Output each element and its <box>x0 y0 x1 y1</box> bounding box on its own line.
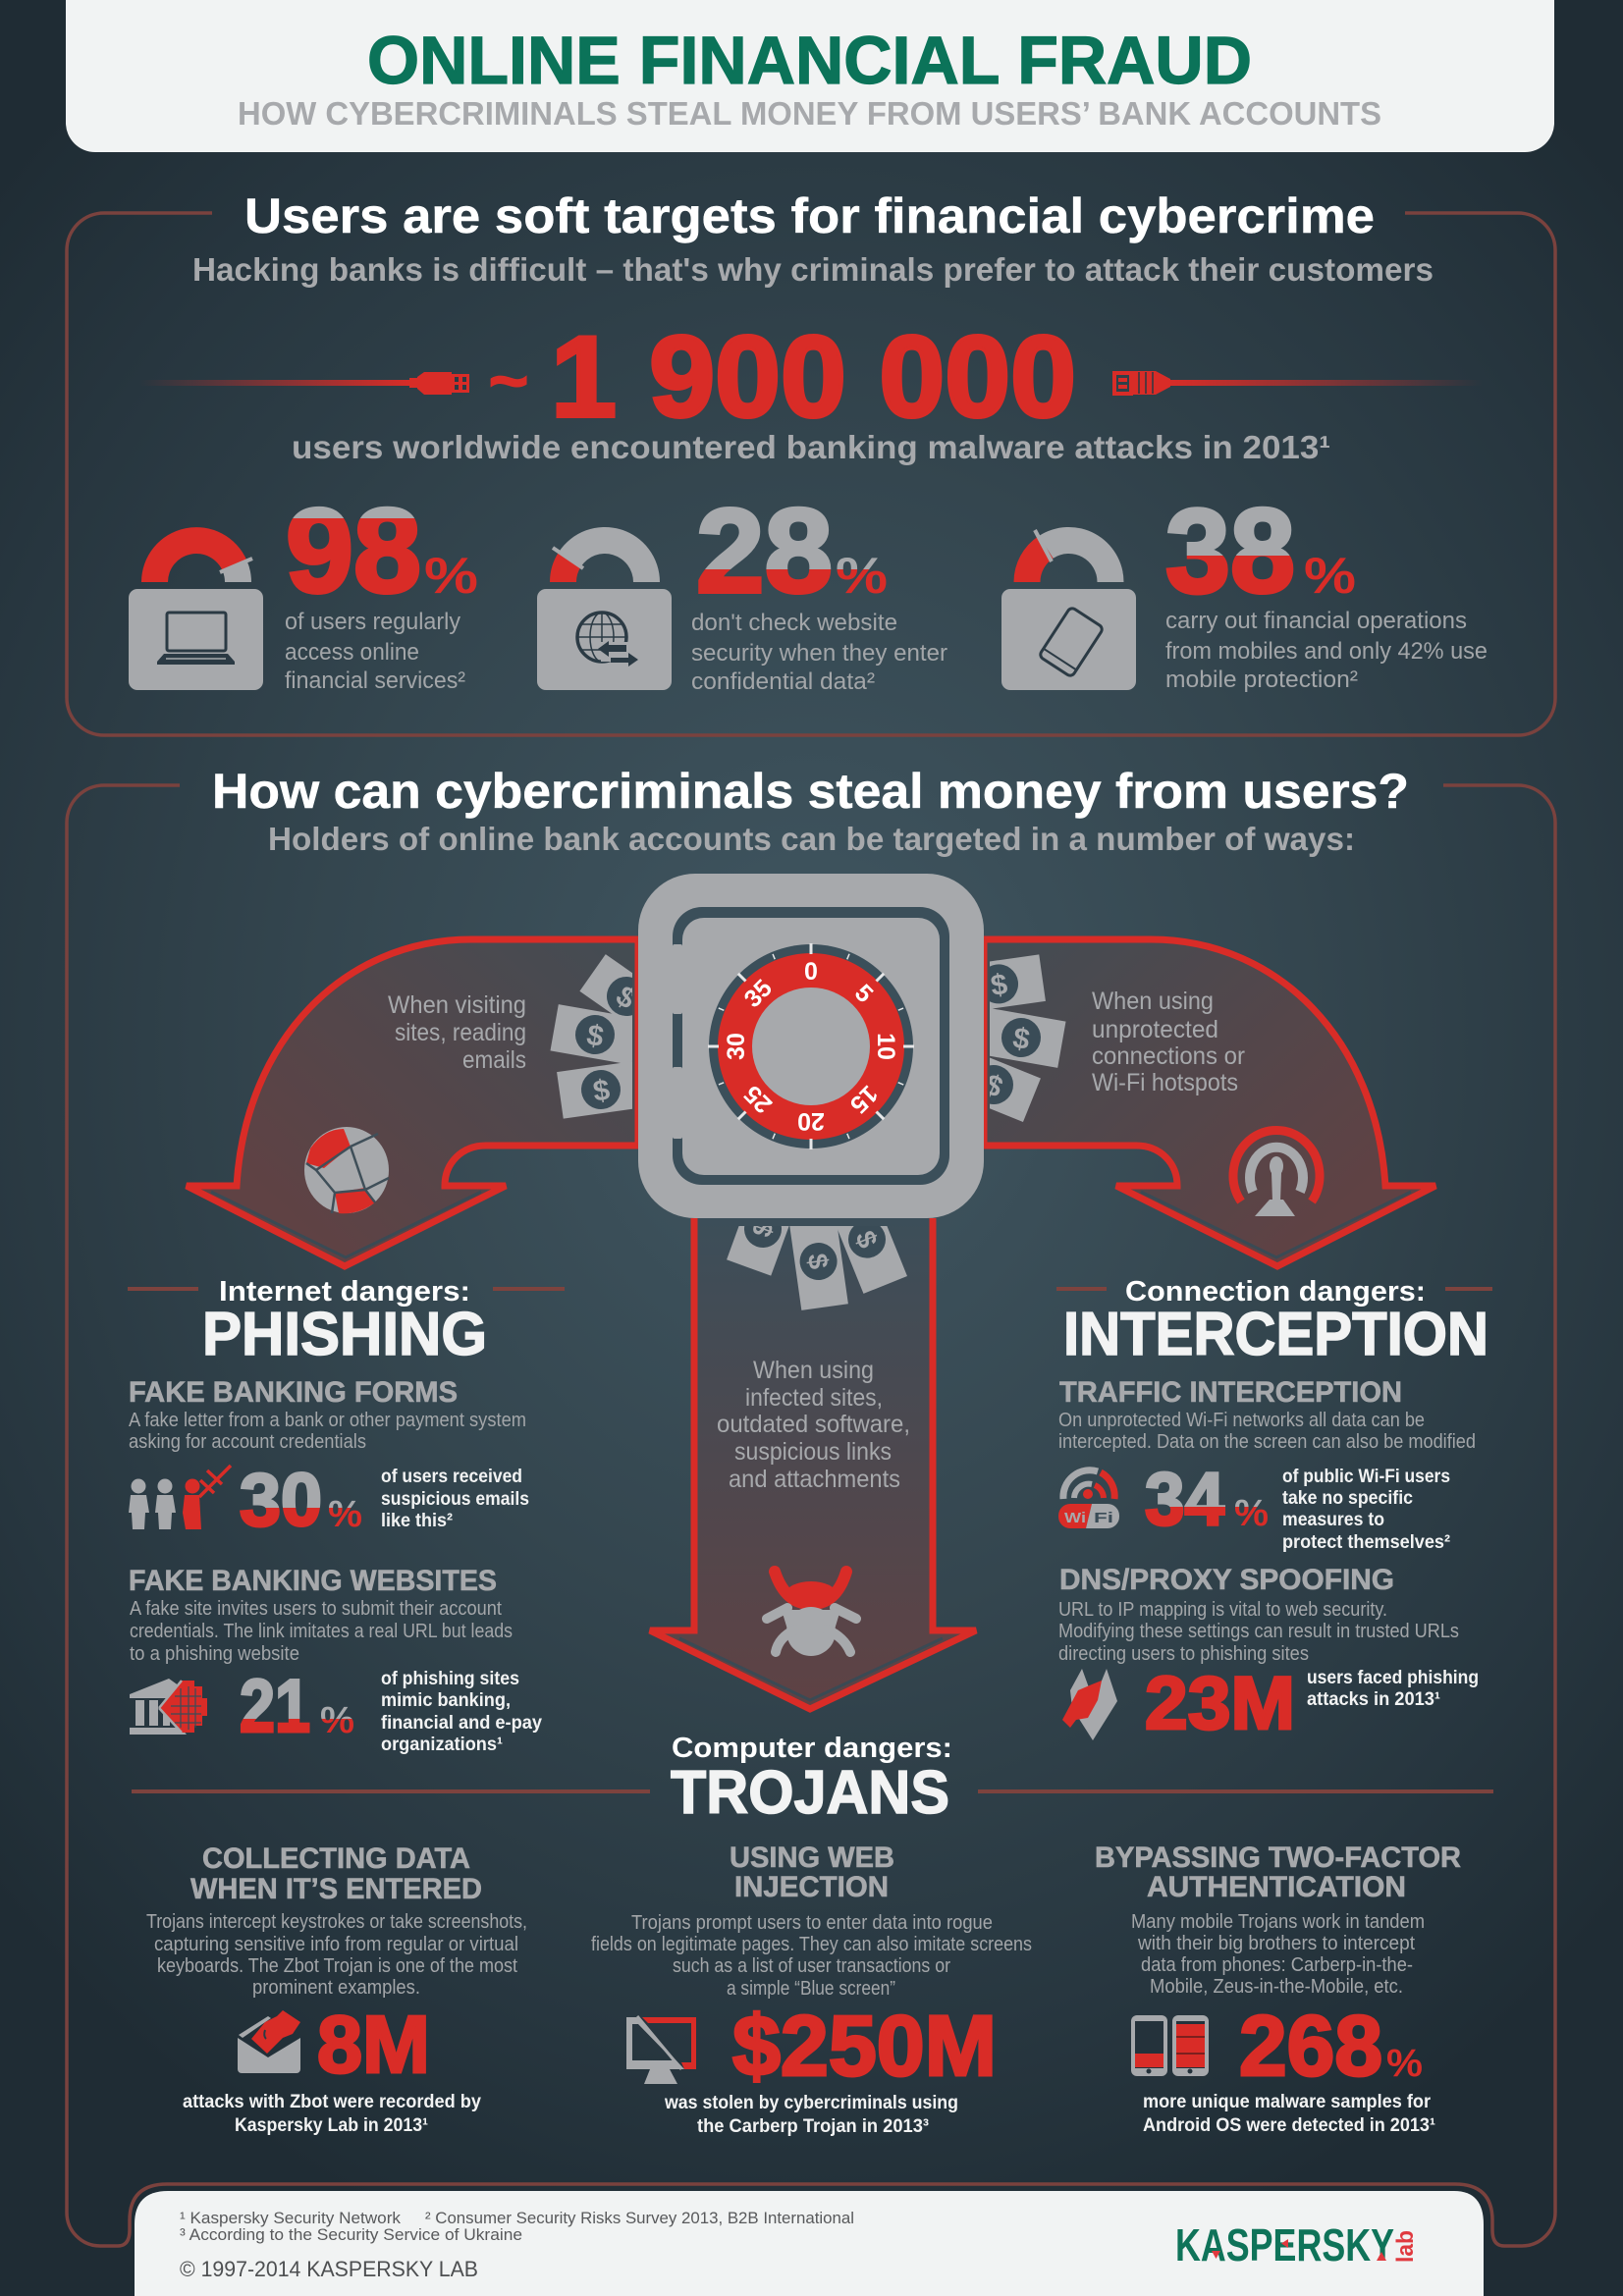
subheading: dns proxy spoofing: DNS/PROXY SPOOFING <box>1059 1564 1394 1596</box>
stat text <box>664 2093 958 2137</box>
heading: Users are soft targets for financial cybercrime <box>244 188 1375 243</box>
text: when using infected sites <box>717 1357 910 1493</box>
body text <box>130 1598 513 1665</box>
dial numbers: 20 <box>797 1107 825 1135</box>
footnotes <box>180 2209 854 2244</box>
heading <box>730 1842 894 1903</box>
logo: kaspersky lab: KASPERSKY <box>1175 2219 1394 2270</box>
stat text: was stolen by cybercriminals using <box>664 2093 958 2113</box>
text: when using infected sites: suspicious links <box>734 1438 892 1466</box>
money: left banknotes: $ <box>591 1074 612 1108</box>
text: when using infected sites: When using <box>753 1357 874 1384</box>
text: when using unprotected <box>1092 988 1245 1096</box>
stat: 28 percent <box>537 484 947 695</box>
text: when using unprotected: unprotected <box>1092 1016 1218 1043</box>
money: right banknotes: $ <box>980 1068 1007 1104</box>
money: bottom banknotes: $ <box>849 1227 884 1253</box>
stat text <box>183 2092 481 2136</box>
text: when using infected sites: and attachments <box>729 1466 900 1493</box>
title: ONLINE FINANCIAL FRAUD <box>367 23 1252 98</box>
arrow: left to phishing <box>187 939 638 1266</box>
stat text <box>1307 1668 1479 1710</box>
body text: Mobile, Zeus-in-the-Mobile, etc. <box>1150 1976 1403 1998</box>
stat text: users faced phishing <box>1307 1668 1479 1688</box>
body text: credentials. The link imitates a real URL but leads <box>130 1621 513 1642</box>
column: web injection <box>591 1842 1032 2137</box>
money: right banknotes <box>990 954 1066 1122</box>
stat text: attacks in 2013¹ <box>1307 1689 1440 1710</box>
body text: with their big brothers to intercept <box>1137 1933 1415 1954</box>
money: left banknotes: $ <box>610 980 642 1016</box>
body text: Trojans intercept keystrokes or take screenshots, <box>146 1911 527 1933</box>
label: Internet dangers: <box>219 1276 470 1308</box>
percent sign: % <box>1304 548 1356 605</box>
icon: bug <box>767 1572 856 1656</box>
text: when visiting: sites, reading <box>395 1019 526 1046</box>
icon: usb cable left <box>139 372 469 395</box>
arrow: centre to trojans <box>650 1218 976 1709</box>
panel: how can cybercriminals steal money <box>67 764 1555 2246</box>
stat text: like this² <box>381 1511 453 1531</box>
icon: antenna <box>1233 1131 1320 1216</box>
footnotes: ¹ Kaspersky Security Network <box>180 2209 402 2227</box>
body text: intercepted. Data on the screen can also be modified <box>1058 1431 1476 1453</box>
stat text: of public Wi-Fi users <box>1282 1467 1450 1487</box>
heading: INJECTION <box>734 1871 889 1903</box>
label: Computer dangers: <box>672 1733 952 1764</box>
subheading: Hacking banks is difficult – that's why criminals prefer to attack their customers <box>192 251 1434 288</box>
body text: A fake site invites users to submit their account <box>130 1598 502 1620</box>
body text: fields on legitimate pages. They can also imitate screens <box>591 1934 1032 1955</box>
body text <box>146 1911 527 1999</box>
number 23M: 23M <box>1145 1662 1295 1745</box>
divider left <box>128 1287 565 1291</box>
text: when using unprotected: Wi-Fi hotspots <box>1092 1069 1238 1096</box>
panel: users are soft targets <box>67 188 1555 735</box>
icon: usb cable right <box>1114 371 1483 395</box>
column: two-factor <box>1095 1842 1461 2136</box>
icon: monitor <box>626 2016 696 2084</box>
heading <box>190 1842 482 1905</box>
icon: wifi <box>1058 1470 1119 1528</box>
stat text: mobile protection² <box>1165 667 1358 693</box>
body text <box>591 1912 1032 2000</box>
section: trojans <box>132 1733 1493 2137</box>
money: left banknotes <box>550 954 632 1119</box>
column: collecting data <box>146 1842 527 2136</box>
body text: data from phones: Carberp-in-the- <box>1141 1954 1413 1976</box>
stat text: of users received <box>381 1467 522 1487</box>
body text <box>129 1410 526 1453</box>
text: when using infected sites: infected sites, <box>745 1384 883 1412</box>
number 98: 98 <box>286 484 421 617</box>
icon: wifi: Wi <box>1064 1510 1086 1526</box>
body text: prominent examples. <box>252 1977 420 1999</box>
stat text: carry out financial operations <box>1165 608 1467 634</box>
dial numbers: 35 <box>739 974 778 1013</box>
footer panel <box>135 2191 1484 2296</box>
number 21: 21 <box>240 1665 310 1748</box>
body text: URL to IP mapping is vital to web security. <box>1058 1599 1387 1621</box>
heading <box>1095 1842 1461 1903</box>
body text <box>1058 1410 1476 1453</box>
body text: directing users to phishing sites <box>1058 1643 1309 1665</box>
percent sign: % <box>328 1494 362 1535</box>
money: bottom banknotes <box>727 1226 907 1310</box>
heading: AUTHENTICATION <box>1147 1871 1406 1903</box>
arrow: right to interception <box>984 939 1435 1266</box>
text: when visiting <box>388 991 526 1074</box>
text: when using unprotected: connections or <box>1092 1042 1245 1070</box>
footnotes: ² Consumer Security Risks Survey 2013, B2B International <box>425 2209 854 2227</box>
heading: How can cybercriminals steal money from users? <box>212 764 1409 819</box>
section: phishing <box>128 1276 565 1755</box>
percent sign: % <box>836 548 888 605</box>
section: interception <box>1056 1276 1492 1745</box>
body text: keyboards. The Zbot Trojan is one of the most <box>157 1955 517 1977</box>
number 28: 28 <box>696 484 833 617</box>
big number: 1 900 000 <box>551 312 1076 441</box>
footnotes: ³ According to the Security Service of Ukraine <box>180 2225 522 2244</box>
stat text <box>1143 2092 1435 2136</box>
stat: 38 percent <box>1001 484 1488 693</box>
stat text: Kaspersky Lab in 2013¹ <box>235 2115 428 2136</box>
body text: Modifying these settings can result in trusted URLs <box>1058 1621 1459 1642</box>
stat text: measures to <box>1282 1510 1384 1530</box>
stat text: attacks with Zbot were recorded by <box>183 2092 481 2112</box>
money: right banknotes: $ <box>1010 1022 1032 1056</box>
dial numbers: 0 <box>804 958 818 986</box>
stat text: the Carberp Trojan in 2013³ <box>697 2116 929 2137</box>
stat text: security when they enter <box>691 640 947 667</box>
divider <box>132 1789 1493 1793</box>
icon: globe network <box>304 1127 389 1213</box>
stat text <box>1165 608 1488 693</box>
number 38: 38 <box>1165 484 1295 617</box>
number 30: 30 <box>240 1459 322 1542</box>
number 268: 268 <box>1239 1999 1382 2094</box>
icon: bank and fake gear <box>130 1679 207 1735</box>
dial numbers: 15 <box>844 1080 883 1119</box>
subheading: fake banking forms: FAKE BANKING FORMS <box>129 1376 458 1409</box>
body text: On unprotected Wi-Fi networks all data can be <box>1058 1410 1425 1431</box>
header panel <box>66 0 1554 152</box>
money: bottom banknotes: $ <box>802 1252 835 1271</box>
stat text <box>285 609 465 694</box>
stat text: mimic banking, <box>381 1690 511 1711</box>
dial numbers: 25 <box>738 1080 778 1118</box>
label: Connection dangers: <box>1125 1276 1426 1308</box>
number 34: 34 <box>1145 1458 1224 1541</box>
body text: a simple “Blue screen” <box>727 1978 895 2000</box>
heading: USING WEB <box>730 1842 894 1874</box>
stat text: more unique malware samples for <box>1143 2092 1432 2112</box>
heading: PHISHING <box>202 1301 487 1368</box>
stat: 98 percent <box>129 484 478 694</box>
money: left banknotes: $ <box>584 1019 606 1053</box>
dial numbers: 5 <box>849 979 879 1008</box>
heading: INTERCEPTION <box>1063 1301 1488 1368</box>
dial numbers <box>723 958 899 1135</box>
stat text: organizations¹ <box>381 1735 503 1755</box>
body text <box>1131 1911 1425 1998</box>
copyright: © 1997-2014 KASPERSKY LAB <box>180 2257 478 2281</box>
heading: COLLECTING DATA <box>202 1842 470 1875</box>
body text: capturing sensitive info from regular or virtual <box>154 1934 518 1955</box>
icon: two phones <box>1131 2015 1209 2076</box>
divider <box>1056 1287 1492 1291</box>
body text: A fake letter from a bank or other payment system <box>129 1410 526 1431</box>
subheading: Holders of online bank accounts can be targeted in a number of ways: <box>268 821 1355 857</box>
body text: Many mobile Trojans work in tandem <box>1131 1911 1425 1933</box>
money: right banknotes: $ <box>989 968 1009 1002</box>
stat text <box>381 1467 529 1531</box>
percent sign: % <box>424 548 478 605</box>
stat text <box>381 1669 542 1755</box>
dial numbers: 30 <box>723 1033 750 1060</box>
percent sign: % <box>320 1700 354 1741</box>
stat text: from mobiles and only 42% use <box>1165 638 1488 665</box>
logo: kaspersky lab: lab <box>1392 2230 1419 2263</box>
money: bottom banknotes: $ <box>745 1216 780 1242</box>
stat text: don't check website <box>691 610 897 636</box>
subheading: traffic interception: TRAFFIC INTERCEPTION <box>1059 1376 1402 1409</box>
stat text: Android OS were detected in 2013¹ <box>1143 2115 1435 2136</box>
body text <box>1058 1599 1459 1665</box>
text: when visiting: When visiting <box>388 991 526 1019</box>
heading: BYPASSING TWO-FACTOR <box>1095 1842 1461 1874</box>
stat text: of users regularly <box>285 609 460 635</box>
heading: TROJANS <box>671 1759 949 1827</box>
body text: Trojans prompt users to enter data into rogue <box>631 1912 993 1934</box>
text: when using unprotected: When using <box>1092 988 1214 1015</box>
tilde: ~ <box>489 347 528 415</box>
stat text <box>691 610 947 695</box>
stat text: of phishing sites <box>381 1669 519 1689</box>
icon: wifi: Fi <box>1094 1510 1113 1526</box>
text: when using infected sites: outdated software, <box>717 1411 910 1438</box>
caption: users worldwide: users worldwide encountered banking malware attacks in 2013¹ <box>292 429 1330 465</box>
icon: people with fishing hook <box>129 1466 231 1529</box>
subtitle: HOW CYBERCRIMINALS STEAL MONEY FROM USERS’ BANK ACCOUNTS <box>238 95 1381 132</box>
stat text: confidential data² <box>691 668 875 695</box>
body text: asking for account credentials <box>129 1431 366 1453</box>
stat text: access online <box>285 639 419 666</box>
icon: envelope with hand <box>238 2010 300 2073</box>
stat text: financial and e-pay <box>381 1713 542 1734</box>
icon: padlock phone <box>1001 527 1136 690</box>
body text: to a phishing website <box>130 1643 299 1665</box>
icon: safe with dial <box>638 874 984 1218</box>
heading: WHEN IT’S ENTERED <box>190 1873 482 1905</box>
stat text: take no specific <box>1282 1488 1413 1509</box>
stat text <box>1282 1467 1450 1553</box>
subheading: fake banking websites: FAKE BANKING WEBSITES <box>129 1565 497 1597</box>
text: when visiting: emails <box>462 1046 526 1074</box>
number 8M: 8M <box>317 1999 430 2090</box>
icon: padlock globe <box>537 527 672 690</box>
stat text: protect themselves² <box>1282 1532 1450 1553</box>
icon: padlock laptop <box>129 527 263 690</box>
icon: spoofing mask <box>1062 1669 1117 1740</box>
percent sign: % <box>1234 1493 1269 1534</box>
stat text: suspicious emails <box>381 1489 529 1510</box>
percent sign: % <box>1386 2042 1423 2085</box>
body text: such as a list of user transactions or <box>673 1955 950 1977</box>
dial numbers: 10 <box>872 1033 899 1060</box>
number 250M: $250M <box>732 1999 997 2094</box>
stat text: financial services² <box>285 667 465 694</box>
